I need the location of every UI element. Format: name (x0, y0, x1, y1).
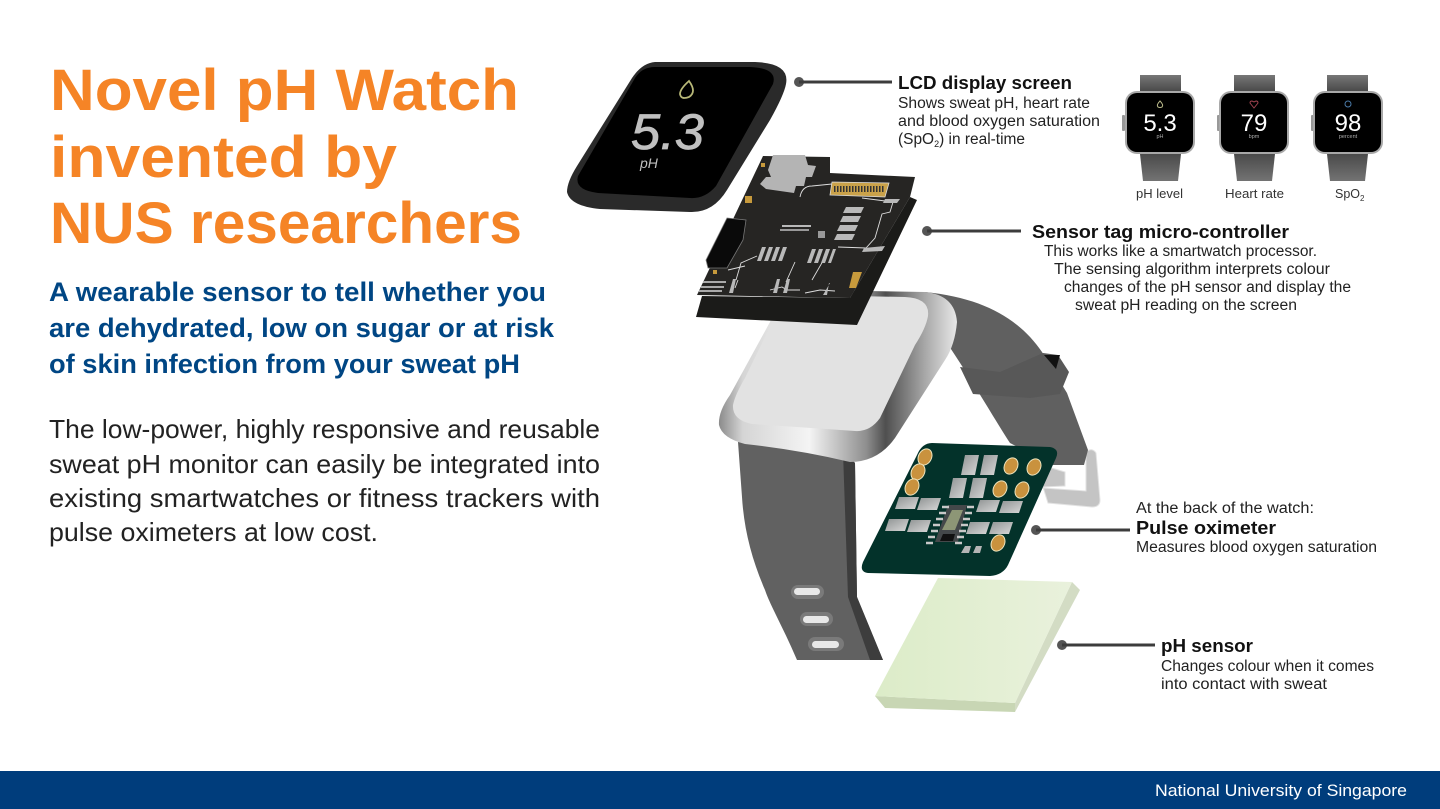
callout: pulse oximeter: Pulse oximeter (1136, 518, 1276, 538)
callout: LCD display screen (794, 73, 1100, 149)
body text: sweat pH monitor can easily be integrated into (49, 449, 600, 479)
subtitle: of skin infection from your sweat pH (49, 349, 520, 379)
body text (49, 414, 600, 547)
upper watch strap (925, 292, 1088, 465)
title: Novel pH Watch (50, 58, 519, 123)
lower watch strap (738, 442, 883, 660)
callout: pH sensor (1057, 636, 1374, 693)
callout: sensor tag micro-controller: changes of the pH sensor and display the (1064, 279, 1351, 296)
upper board layer (697, 156, 915, 298)
callout: LCD display screen: ) in real-time (939, 131, 1025, 148)
watch face: pH level (1122, 75, 1195, 181)
watch face captions (1136, 187, 1365, 203)
callout: LCD display screen: LCD display screen (898, 73, 1072, 93)
watch face: heart rate: 79 (1241, 110, 1267, 137)
sensor pads (885, 455, 1023, 534)
lower board layer (696, 197, 917, 325)
callout: pulse oximeter: At the back of the watch: (1136, 500, 1314, 517)
strap keeper (960, 353, 1069, 398)
pulse oximeter board (862, 443, 1057, 576)
body text: existing smartwatches or fitness trackers with (49, 483, 600, 513)
title: NUS researchers (50, 191, 522, 256)
exploded watch illustration (567, 62, 1100, 712)
title: invented by (50, 125, 397, 190)
flex connector (706, 218, 746, 268)
callout: pulse oximeter (1031, 500, 1377, 556)
gold contacts (902, 446, 1044, 554)
USB connector (760, 155, 816, 193)
watch face: SpO2 (1311, 75, 1383, 181)
watch buckle (1040, 450, 1100, 507)
gold header connector (830, 182, 889, 197)
LCD display: pH (639, 155, 659, 171)
watch face: heart rate: bpm (1249, 134, 1260, 140)
callout: LCD display screen: (SpO (898, 131, 934, 148)
callout: pH sensor: pH sensor (1161, 636, 1253, 656)
callout: sensor tag micro-controller: This works like a smartwatch processor. (1044, 243, 1317, 260)
LCD display: 5.3 (631, 104, 704, 160)
callout: pH sensor: into contact with sweat (1161, 676, 1328, 693)
subtitle: A wearable sensor to tell whether you (49, 277, 546, 307)
watch face captions: 2 (1360, 194, 1365, 203)
drop icon (680, 81, 693, 98)
footer bar (0, 771, 1440, 809)
optical sensor chip (926, 505, 974, 543)
body text: pulse oximeters at low cost. (49, 517, 378, 547)
body text: The low-power, highly responsive and reusable (49, 414, 600, 444)
watch face captions: SpO (1335, 187, 1360, 201)
watch screen (733, 295, 928, 431)
footer text: National University of Singapore (1155, 781, 1407, 800)
callout: LCD display screen: and blood oxygen saturation (898, 113, 1100, 130)
small pads (961, 546, 982, 553)
callout: LCD display screen: 2 (934, 139, 939, 149)
LCD display (567, 62, 786, 212)
title (50, 58, 522, 256)
callout: LCD display screen: Shows sweat pH, heart rate (898, 95, 1090, 112)
callout: pH sensor: Changes colour when it comes (1161, 658, 1374, 675)
watch face: heart rate (1217, 75, 1289, 181)
watch face: SpO2: 98 (1335, 110, 1361, 137)
callout: sensor tag micro-controller: The sensing algorithm interprets colour (1054, 261, 1330, 278)
traces (728, 184, 893, 293)
watch face: SpO2: percent (1339, 134, 1358, 140)
sensor tag micro-controller board (696, 155, 917, 325)
watch face: pH level: 5.3 (1143, 110, 1177, 137)
callout: sensor tag micro-controller: sweat pH reading on the screen (1075, 297, 1297, 314)
watch face captions: Heart rate (1225, 187, 1284, 201)
callout: sensor tag micro-controller (922, 222, 1351, 314)
strap holes (791, 585, 844, 651)
watch face: pH level: pH (1156, 134, 1164, 140)
subtitle: are dehydrated, low on sugar or at risk (49, 313, 555, 343)
pH sensor patch (875, 578, 1080, 712)
watch face captions: pH level (1136, 187, 1183, 201)
gold capacitors (713, 163, 862, 288)
subtitle (49, 277, 555, 379)
callout: sensor tag micro-controller: Sensor tag micro-controller (1032, 222, 1289, 242)
surface-mount chips (699, 199, 900, 295)
watch case bezel (719, 290, 957, 462)
callout: pulse oximeter: Measures blood oxygen saturation (1136, 539, 1377, 556)
